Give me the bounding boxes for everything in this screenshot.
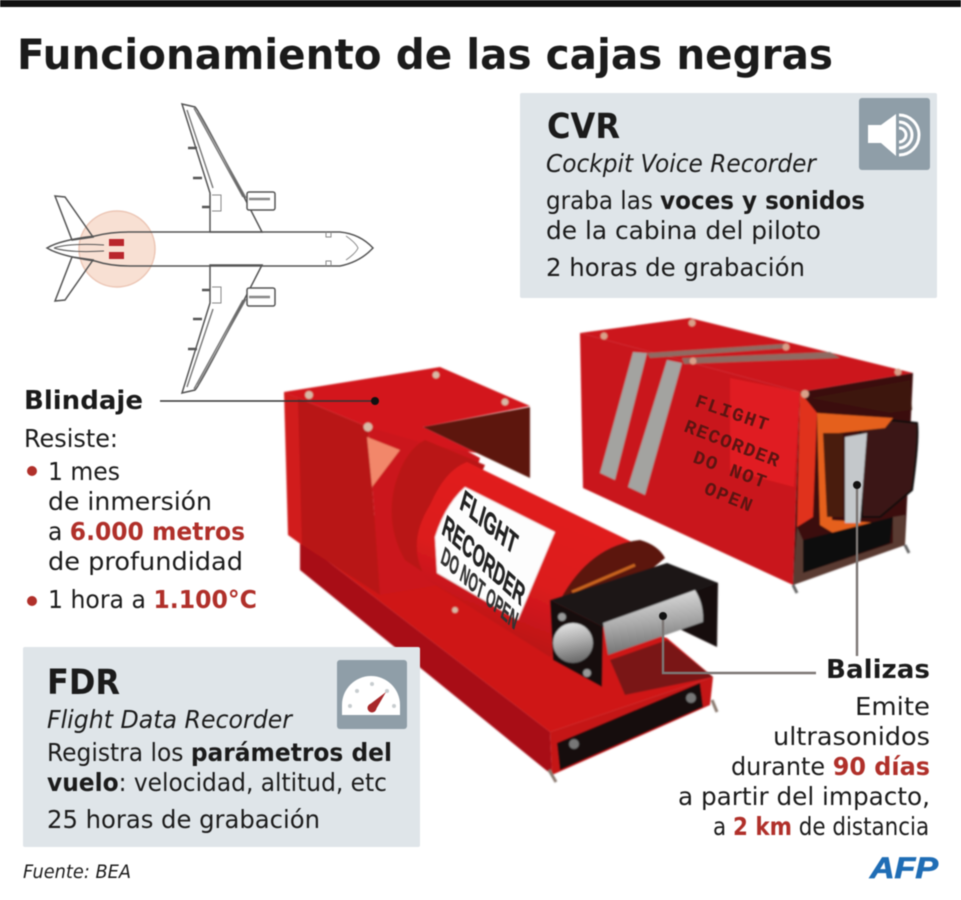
title: Funcionamiento de las cajas negras xyxy=(17,30,833,79)
FDR description: vuelo: velocidad, altitud, etc xyxy=(47,768,387,797)
text block: Blindaje: 1 mes xyxy=(48,457,120,486)
AFP logo: AFP xyxy=(869,852,939,885)
leader: baliza FDR xyxy=(659,612,816,673)
orange beacon mount xyxy=(817,413,893,542)
base plate top xyxy=(300,500,713,732)
cylinder xyxy=(417,462,663,657)
text block: Blindaje: a 6.000 metros xyxy=(48,517,245,546)
printed label: flight recorder: RECORDER xyxy=(439,508,528,612)
light triangle xyxy=(367,437,400,487)
FDR description xyxy=(47,738,392,834)
printed label: flight recorder: FLIGHT xyxy=(457,483,521,561)
text block: Balizas: ultrasonidos xyxy=(773,722,930,751)
text block: Blindaje: Resiste: xyxy=(24,424,118,453)
printed label: flight recorder do not open: RECORDER xyxy=(681,416,783,473)
CVR description: de la cabina del piloto xyxy=(546,216,821,245)
bolts xyxy=(600,320,902,398)
printed label: flight recorder do not open xyxy=(681,391,783,517)
white label xyxy=(435,487,555,620)
top black bar xyxy=(0,0,961,7)
base plate side xyxy=(300,540,552,775)
FDR name: Flight Data Recorder xyxy=(47,705,294,734)
icon: speaker xyxy=(859,98,930,170)
panel: CVR xyxy=(520,93,937,298)
black front slot xyxy=(557,683,703,770)
text block: Balizas: durante 90 días xyxy=(731,752,930,781)
text block: Blindaje: de profundidad xyxy=(48,547,243,576)
panel: FDR xyxy=(23,647,420,847)
FDR heading: FDR xyxy=(47,663,120,703)
housing xyxy=(284,392,380,595)
CVR heading: CVR xyxy=(547,107,620,147)
CVR description xyxy=(546,186,865,282)
leader: blindaje xyxy=(160,397,379,405)
grey stripes xyxy=(600,352,647,480)
printed label: flight recorder: DO NOT OPEN xyxy=(439,541,521,635)
corner column xyxy=(797,392,817,527)
box body xyxy=(580,318,913,392)
cylinder end opening xyxy=(560,540,665,620)
bolts xyxy=(305,372,508,613)
FDR description: 25 horas de grabación xyxy=(47,805,320,834)
printed label: flight recorder do not open: FLIGHT xyxy=(692,391,771,436)
FDR description: Registra los parámetros del xyxy=(47,738,392,767)
airplane diagram xyxy=(47,104,373,393)
CVR description: 2 horas de grabación xyxy=(546,253,805,282)
text block: Blindaje: 1 hora a 1.100°C xyxy=(48,585,257,614)
text block: Balizas: a partir del impacto, xyxy=(678,782,930,811)
illustration: FDR recorder box xyxy=(284,367,718,782)
collar xyxy=(392,440,485,580)
silver beacon xyxy=(603,590,703,655)
airplane outline xyxy=(47,104,373,393)
text block: Balizas xyxy=(678,655,930,841)
source: Fuente: BEA xyxy=(23,861,131,883)
text block: Blindaje: de inmersión xyxy=(48,487,212,516)
printed label: flight recorder xyxy=(439,483,528,635)
black bracket xyxy=(667,563,718,647)
base plate front xyxy=(550,677,713,775)
printed label: flight recorder do not open: DO NOT xyxy=(690,447,769,494)
text block: Balizas: Balizas xyxy=(826,655,930,685)
text block: Blindaje: Blindaje xyxy=(24,386,143,416)
illustration: CVR recorder box xyxy=(580,318,917,593)
CVR name: Cockpit Voice Recorder xyxy=(546,149,818,178)
CVR description: graba las voces y sonidos xyxy=(546,186,865,215)
text block: Balizas: a 2 km de distancia xyxy=(713,812,929,841)
leader: baliza CVR xyxy=(853,481,861,656)
text block: Balizas: Emite xyxy=(855,692,930,721)
text block: Blindaje xyxy=(24,386,257,614)
icon: gauge xyxy=(337,660,407,729)
dark housing with black strap xyxy=(860,417,917,517)
recorder markers in the tail xyxy=(109,239,124,246)
highlight circle on tail xyxy=(79,211,155,287)
printed label: flight recorder do not open: OPEN xyxy=(701,478,755,517)
